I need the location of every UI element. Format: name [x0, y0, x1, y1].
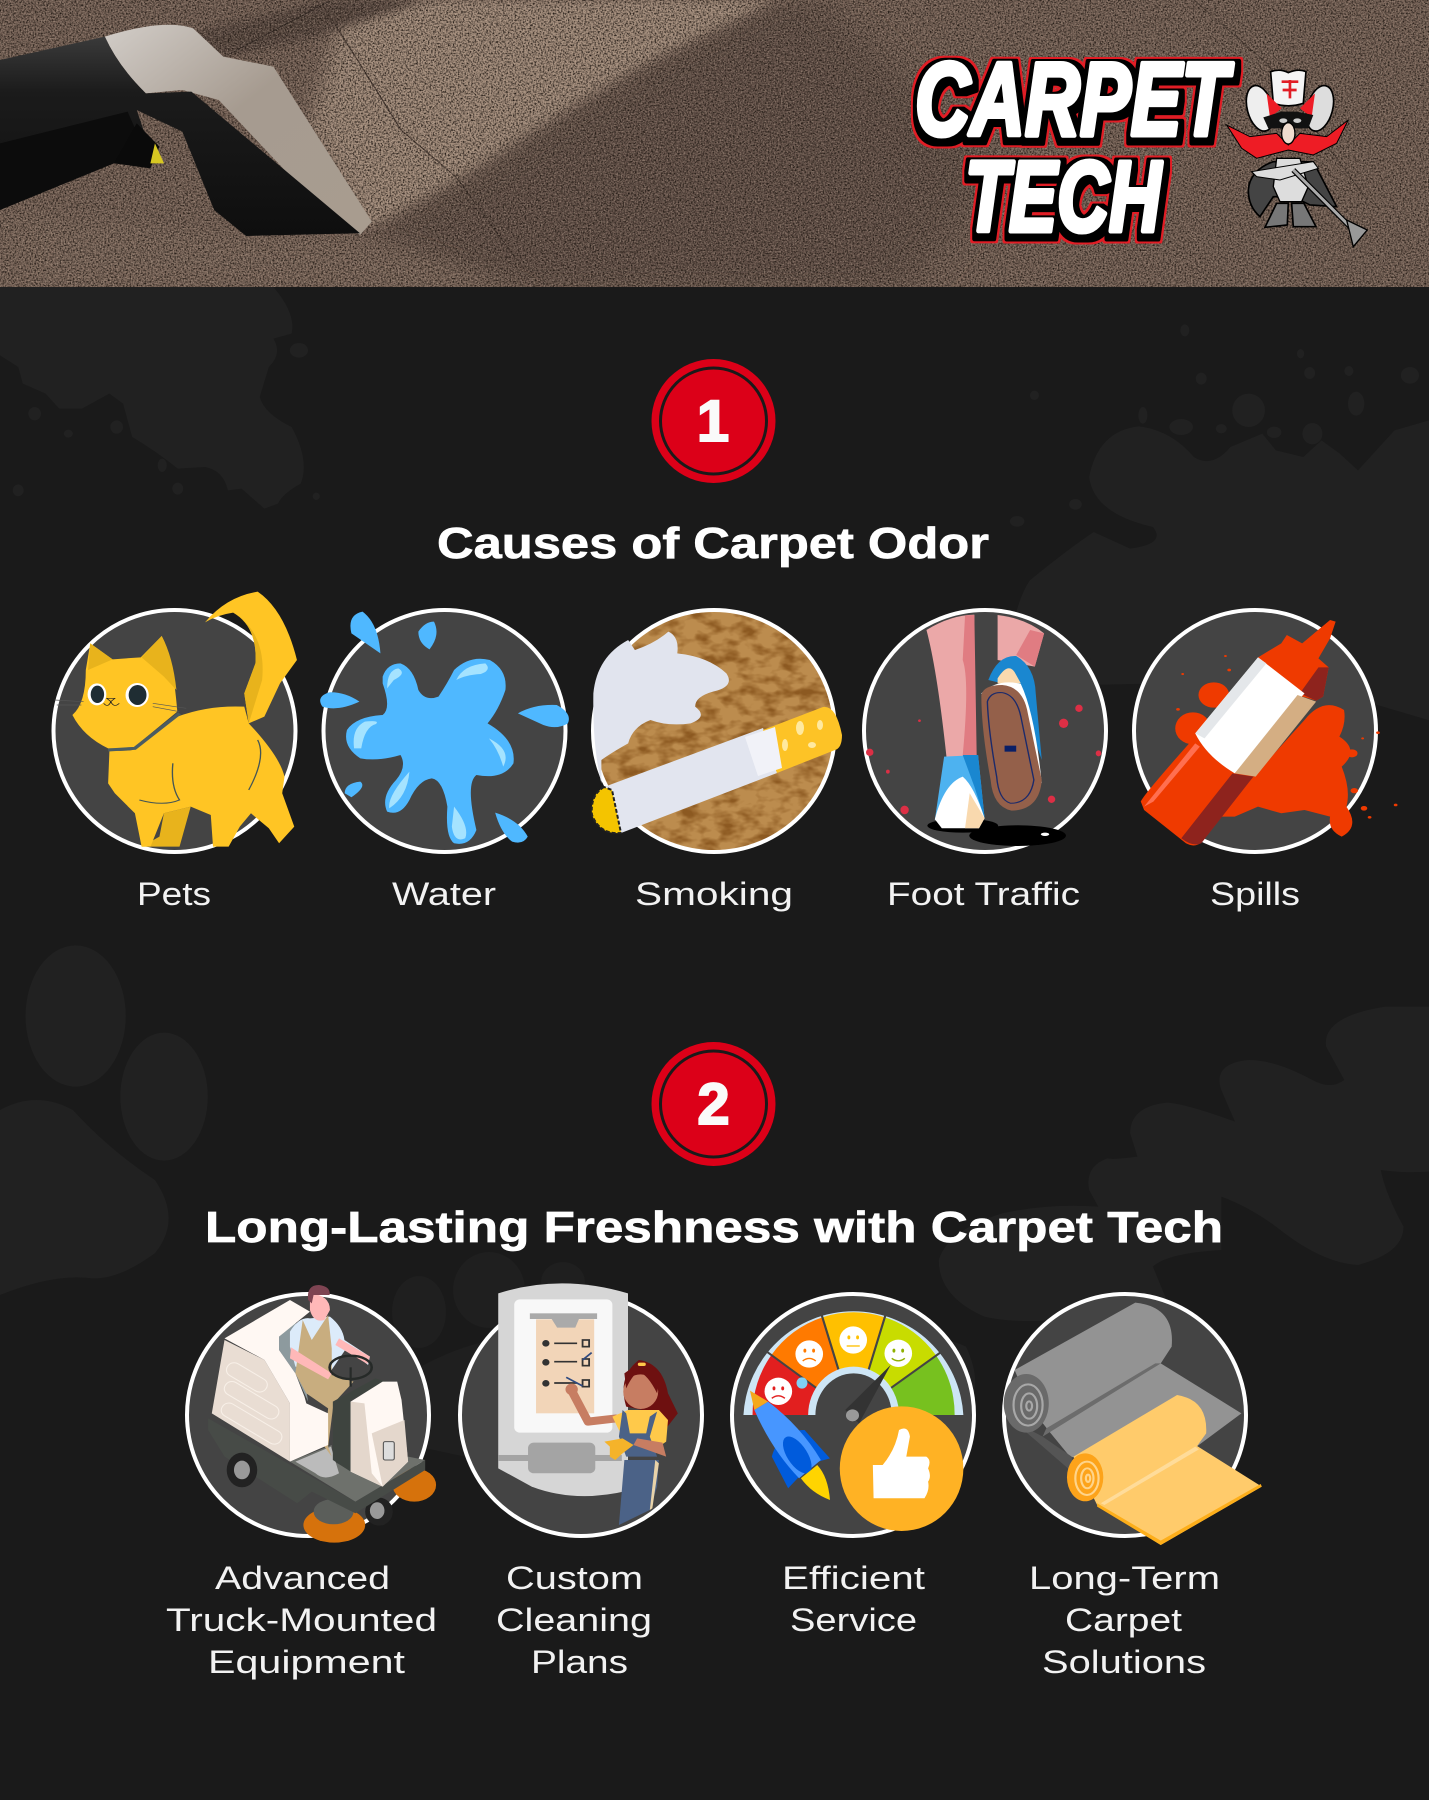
logo mascot — [1227, 70, 1367, 247]
logo wordmark: CARPET — [915, 42, 1233, 158]
label: efficient service: Service — [790, 1602, 917, 1638]
cause: smoking — [592, 610, 842, 852]
icon: carpet cleaning wand — [0, 25, 372, 236]
icon: checklist board and worker — [498, 1283, 678, 1525]
cause: water — [320, 610, 569, 852]
circle — [1004, 1294, 1246, 1536]
label: water: Water — [392, 876, 496, 912]
background stains and paw prints — [0, 287, 1429, 1460]
service: efficient — [732, 1294, 974, 1536]
label: efficient service — [782, 1560, 925, 1638]
label: long-term carpet solutions: Solutions — [1042, 1644, 1206, 1680]
label: custom cleaning plans: Cleaning — [496, 1602, 652, 1638]
label: smoking: Smoking — [635, 876, 793, 912]
label: advanced truck-mounted equipment: Advanced — [215, 1560, 390, 1596]
label: pets: Pets — [137, 876, 211, 912]
label: long-term carpet solutions: Carpet — [1065, 1602, 1182, 1638]
header carpet photo — [0, 0, 1429, 287]
cause: foot traffic — [864, 610, 1106, 852]
circle — [460, 1294, 702, 1536]
carpet chip texture — [595, 612, 833, 850]
label: long-term carpet solutions — [1029, 1560, 1220, 1680]
cause: pets — [54, 592, 297, 852]
service: custom plans — [460, 1283, 702, 1536]
circle — [593, 610, 835, 852]
circle — [732, 1294, 974, 1536]
label: spills: Spills — [1210, 876, 1300, 912]
icon: water splash — [320, 612, 569, 844]
label: custom cleaning plans: Plans — [531, 1644, 628, 1680]
label: custom cleaning plans: Custom — [506, 1560, 643, 1596]
icon: cigarette — [592, 707, 842, 833]
logo wordmark — [915, 42, 1233, 253]
badge: number 1 — [652, 359, 776, 483]
label: advanced truck-mounted equipment: Equipment — [208, 1644, 405, 1680]
circle — [864, 610, 1106, 852]
heading: causes: Causes of Carpet Odor — [437, 519, 989, 568]
labels: causes — [137, 876, 1300, 912]
labels: services — [166, 1560, 1220, 1680]
circle — [1134, 610, 1376, 852]
label: advanced truck-mounted equipment — [166, 1560, 437, 1680]
cause: spills — [1134, 610, 1398, 852]
logo wordmark: TECH — [965, 141, 1162, 253]
logo: Carpet Tech — [915, 42, 1367, 253]
icon: floor scrubber — [208, 1285, 436, 1543]
icon: feet — [866, 615, 1101, 846]
icon: sauce bottle — [1141, 620, 1398, 845]
label: foot traffic: Foot Traffic — [887, 876, 1080, 912]
service: long-term solutions — [1004, 1294, 1262, 1545]
badge: number 2: 2 — [697, 1072, 730, 1137]
label: advanced truck-mounted equipment: Truck-Mounted — [166, 1602, 437, 1638]
label: custom cleaning plans — [496, 1560, 652, 1680]
icon: speed gauge — [743, 1310, 963, 1531]
icon: cat — [55, 592, 297, 847]
circle — [324, 610, 566, 852]
circle — [187, 1294, 429, 1536]
service: truck-mounted equipment — [187, 1285, 436, 1543]
badge: number 2 — [652, 1042, 776, 1166]
label: efficient service: Efficient — [782, 1560, 925, 1596]
label: long-term carpet solutions: Long-Term — [1029, 1560, 1220, 1596]
heading: freshness: Long-Lasting Freshness with Carpet Tech — [205, 1203, 1223, 1252]
circle — [54, 610, 296, 852]
icon: smoke — [593, 632, 729, 783]
badge: number 1: 1 — [697, 389, 729, 454]
icon: carpet rolls — [1004, 1303, 1262, 1545]
